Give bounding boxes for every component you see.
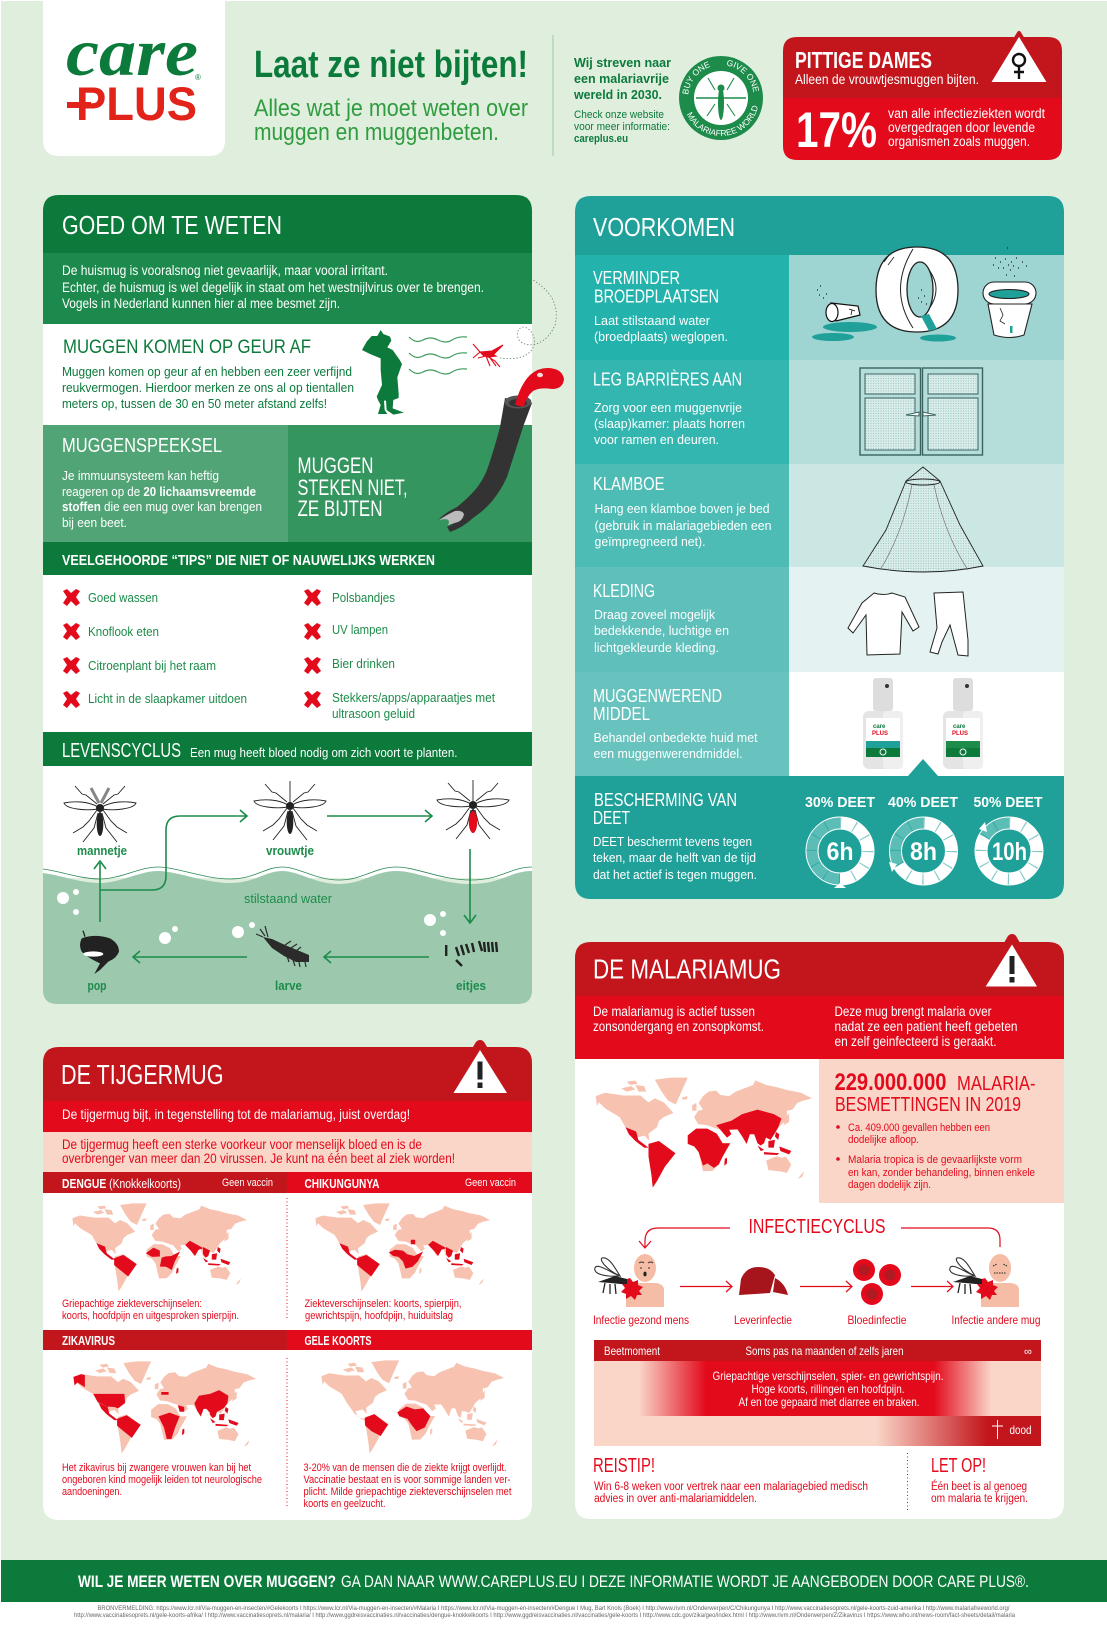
icon: flower pot — [983, 282, 1036, 338]
timeline: Griepachtige verschijnselen, spier- en gewrichtspijn. — [712, 1369, 944, 1383]
icon: pupa — [80, 931, 119, 974]
muggen steken niet: ZE BIJTEN — [298, 496, 382, 521]
panel: de tijgermug — [43, 1045, 532, 1520]
row: leg barrieres aan: (slaap)kamer: plaats horren — [594, 416, 745, 431]
tips list: UV lampen — [332, 622, 388, 637]
step labels: Infectie gezond mens — [593, 1313, 689, 1327]
logo card — [43, 0, 225, 156]
heading: DE TIJGERMUG — [61, 1059, 224, 1090]
row: klamboe: (gebruik in malariagebieden een — [594, 518, 772, 533]
panel: pittige dames: PITTIGE DAMES — [795, 47, 932, 73]
labels: eitjes — [456, 978, 486, 993]
icon: eggs — [445, 941, 497, 966]
panel: pittige dames — [783, 33, 1062, 160]
tips list: Bier drinken — [332, 656, 395, 671]
panel: voorkomen — [575, 196, 1064, 899]
labels: mannetje — [77, 843, 127, 858]
row: bescherming van deet: dat het actief is tegen muggen. — [593, 867, 757, 882]
reistip: Win 6-8 weken voor vertrek naar een malariagebied medisch — [594, 1481, 868, 1493]
card: gele koorts: Vaccinatie bestaat en is voor sommige landen ver- — [304, 1474, 511, 1486]
card: gele koorts: koorts en geelzucht. — [304, 1498, 386, 1510]
timeline: dood — [1010, 1423, 1032, 1437]
heading: VOORKOMEN — [593, 212, 735, 242]
row: klamboe: Hang een klamboe boven je bed — [594, 501, 770, 516]
icon: larva — [256, 926, 309, 967]
text: geur — [62, 364, 354, 411]
text: geur: reukvermogen. Hierdoor merken ze ons al op tientallen — [62, 380, 354, 395]
intro text — [62, 263, 484, 311]
intro text: De huismug is vooralsnog niet gevaarlijk, maar vooral irritant. — [62, 263, 388, 278]
stat: infections: en kan, zonder behandeling, binnen enkele — [848, 1167, 1035, 1179]
heading: DE MALARIAMUG — [593, 954, 781, 984]
logo card: PLUS — [76, 77, 197, 130]
clock: 6h — [806, 817, 874, 888]
logo card: care — [66, 14, 198, 90]
mosquito: female — [254, 781, 326, 840]
muggen steken niet: MUGGEN — [298, 453, 374, 478]
life cycle diagram: stilstaand water — [244, 891, 333, 906]
labels — [77, 843, 486, 993]
icon: spray bottle 1: care — [873, 724, 886, 730]
levenscyclus heading: Een mug heeft bloed nodig om zich voort te planten. — [190, 745, 458, 760]
labels: larve — [275, 978, 302, 993]
row: bescherming van deet: teken, maar de helft van de tijd — [593, 850, 756, 865]
panel: pittige dames: organismen zoals muggen. — [888, 134, 1030, 149]
row: bescherming van deet: BESCHERMING VAN — [594, 790, 737, 810]
cycle arrows — [94, 810, 476, 963]
icon: spray bottle 1: PLUS — [872, 731, 888, 737]
malaria free text: careplus.eu — [574, 133, 628, 145]
card: gele koorts: GELE KOORTS — [304, 1333, 372, 1348]
icon: tyre — [876, 247, 958, 332]
panel: de tijgermug: De tijgermug heeft een sterke voorkeur voor menselijk bloed en is de — [62, 1136, 422, 1152]
panel: goed om te weten — [43, 195, 564, 1004]
row: leg barrieres aan: LEG BARRIÈRES AAN — [593, 370, 742, 390]
levenscyclus heading: LEVENSCYCLUS — [62, 740, 181, 762]
icon: healthy person with mosquito — [595, 1254, 664, 1307]
icon: blood cells — [853, 1259, 901, 1305]
malaria free world badge: GIVE ONE — [727, 60, 760, 92]
panel: pittige dames: overgedragen door levende — [888, 120, 1035, 135]
icon: warning female — [988, 33, 1050, 84]
icon: mosquito net — [863, 467, 983, 572]
intro text: Echter, de huismug is wel degelijk in staat om het westnijlvirus over te brengen. — [62, 280, 484, 295]
icon: mosquito specks — [817, 248, 1027, 304]
row: bescherming van deet: DEET — [593, 808, 630, 828]
icon: mosquito proboscis — [438, 368, 564, 532]
panel: de tijgermug: overbrenger van meer dan 20 virussen. Je kunt na één beet al ziek worden! — [62, 1150, 455, 1166]
row: muggenwerend middel — [575, 672, 1064, 776]
smell waves — [409, 337, 467, 374]
row: klamboe: geïmpregneerd net). — [594, 534, 706, 549]
card: dengue: Griepachtige ziekteverschijnselen: — [62, 1298, 202, 1310]
stat: infections — [834, 1069, 1036, 1191]
icon: window — [860, 368, 982, 455]
row: verminder broedplaatsen: VERMINDER — [593, 268, 680, 288]
row: bescherming van deet: 50% DEET — [974, 794, 1042, 811]
icon: spray bottle 1 — [863, 678, 903, 769]
reistip: REISTIP! — [593, 1455, 655, 1477]
malaria free world badge: BUY ONE — [682, 61, 710, 94]
malaria free world badge: MALARIAFREE WORLD — [686, 106, 758, 136]
row: muggenwerend middel: MIDDEL — [593, 704, 650, 724]
reistip — [593, 1455, 868, 1505]
intro right: nadat ze een patient heeft gebeten — [834, 1019, 1018, 1034]
clock: 8h: 8h — [910, 838, 937, 866]
muggenspeeksel: bij een beet. — [62, 515, 127, 530]
infection cycle — [593, 1216, 1040, 1327]
malaria free text: wereld in 2030. — [573, 87, 662, 102]
row: kleding — [575, 567, 1064, 672]
header band — [43, 1, 1062, 160]
step labels: Infectie andere mug — [952, 1313, 1040, 1327]
row: bescherming van deet — [575, 759, 1064, 899]
text: geur: Muggen komen op geur af en hebben een zeer verfijnd — [62, 364, 352, 379]
title: Laat ze niet bijten! — [254, 44, 528, 86]
timeline: Af en toe gepaard met diarree en braken. — [738, 1395, 920, 1409]
timeline: Hoge koorts, rillingen en hoofdpijn. — [752, 1382, 904, 1396]
tips list: Knoflook eten — [88, 624, 159, 639]
row: bescherming van deet: 30% DEET — [805, 794, 875, 811]
card: chikungunya: Geen vaccin — [465, 1177, 516, 1189]
intro left: zonsondergang en zonsopkomst. — [593, 1019, 764, 1034]
tips list: Licht in de slaapkamer uitdoen — [88, 691, 247, 706]
bubbles — [57, 889, 446, 944]
icon: spray bottle 2: PLUS — [952, 731, 968, 737]
malaria free text: voor meer informatie: — [574, 121, 670, 133]
subtitle: muggen en muggenbeten. — [254, 119, 499, 146]
labels: pop — [88, 978, 107, 993]
timeline: ∞ — [1024, 1346, 1032, 1358]
icon: trousers — [930, 592, 968, 656]
stat: infections: MALARIA- — [957, 1073, 1036, 1095]
clock: 6h: 6h — [826, 838, 854, 866]
malaria free text: een malariavrije — [574, 71, 669, 86]
card: dengue — [43, 1172, 287, 1322]
source references: BRONVERMELDING: https://www.lcr.nl/Via-muggen-en-insecten/#Gelekoorts I https://www.lcr.nl/Via-muggen-en-insecten/#Malaria I https://www.lcr.nl/Via-muggen-en-insecten/#Dengue I Mug, Bart Knols (Boek) I http://www.rivm.nl/Onderwerpen/C/Chikungunya I http://www.vaccinatiesoprets.nl/gele-koorts-zuid-amerika I http://www.malariafreeworld.org/ — [98, 1606, 1010, 1612]
tips list: Stekkers/apps/apparaatjes met — [332, 690, 495, 705]
row: kleding: bedekkende, luchtige en — [594, 623, 729, 638]
life cycle diagram — [43, 766, 532, 1004]
source references — [74, 1606, 1016, 1619]
card: dengue: koorts, hoofdpijn en uitgesproken spierpijn. — [62, 1310, 239, 1322]
card: gele koorts: 3-20% van de mensen die de ziekte krijgt overlijdt. — [304, 1462, 506, 1474]
icon: infected person with mosquito — [950, 1254, 1019, 1307]
card: gele koorts — [287, 1330, 532, 1510]
let op — [931, 1455, 1028, 1505]
stat: infections: BESMETTINGEN IN 2019 — [835, 1094, 1021, 1116]
timeline — [594, 1340, 1041, 1446]
muggen steken niet — [288, 425, 532, 542]
panel: pittige dames: van alle infectieziekten wordt — [888, 106, 1045, 121]
let op: LET OP! — [931, 1455, 986, 1477]
card: zikavirus: ongeboren kind mogelijk leiden tot neurologische — [62, 1474, 262, 1486]
intro right: Deze mug brengt malaria over — [834, 1004, 992, 1019]
tips heading: VEELGEHOORDE “TIPS” DIE NIET OF NAUWELIJKS WERKEN — [62, 552, 435, 569]
tips list — [43, 575, 532, 732]
muggenspeeksel: Je immuunsysteem kan heftig — [62, 468, 219, 483]
icon: spray bottle 2 — [943, 678, 983, 769]
malaria free text — [573, 55, 671, 145]
intro left: De malariamug is actief tussen — [593, 1004, 755, 1019]
row: leg barrieres aan — [575, 360, 1064, 464]
icon: liver — [739, 1267, 788, 1295]
stat: infections: dagen dodelijk zijn. — [848, 1179, 931, 1191]
malaria free text: Check onze website — [574, 109, 664, 121]
flight path — [500, 280, 556, 359]
footer bar — [1, 1560, 1107, 1602]
row: verminder broedplaatsen — [575, 247, 1064, 360]
malaria free text: Wij streven naar — [574, 55, 671, 70]
row: verminder broedplaatsen: Laat stilstaand water — [594, 313, 711, 328]
card: zikavirus: Het zikavirus bij zwangere vrouwen kan bij het — [62, 1462, 251, 1474]
icon: red mosquito — [473, 344, 503, 367]
row: verminder broedplaatsen: (broedplaats) weglopen. — [594, 329, 728, 344]
mosquito: fed female — [437, 780, 509, 839]
intro left — [593, 1004, 764, 1034]
row: muggenwerend middel: een muggenwerendmiddel. — [594, 746, 742, 761]
icon: shirt — [848, 593, 919, 655]
icon: man smelling — [362, 330, 404, 415]
stat: infections: Malaria tropica is de gevaarlijkste vorm — [848, 1154, 1022, 1166]
timeline: Beetmoment — [604, 1344, 661, 1358]
malaria free world badge — [679, 56, 763, 140]
row: muggenwerend middel: MUGGENWEREND — [593, 686, 722, 706]
clock: 10h: 10h — [992, 838, 1027, 866]
subheading: geur: MUGGEN KOMEN OP GEUR AF — [63, 336, 311, 358]
panel: de malariamug — [575, 939, 1064, 1519]
clock: 10h — [975, 817, 1043, 885]
card: dengue: Geen vaccin — [222, 1177, 273, 1189]
muggenspeeksel: stoffen die een mug over kan brengen — [62, 499, 262, 514]
labels: vrouwtje — [266, 843, 314, 858]
card: chikungunya: Ziekteverschijnselen: koorts, spierpijn, — [304, 1298, 462, 1310]
card: zikavirus — [43, 1330, 287, 1498]
row: muggenwerend middel: Behandel onbedekte huid met — [594, 730, 758, 745]
card: chikungunya: gewrichtspijn, hoofdpijn, huiduitslag — [305, 1310, 453, 1322]
card: chikungunya — [287, 1172, 532, 1322]
stat: infections: dodelijke afloop. — [848, 1134, 919, 1146]
step labels: Leverinfectie — [734, 1313, 792, 1327]
row: klamboe — [575, 464, 1064, 572]
row: bescherming van deet: 40% DEET — [888, 794, 958, 811]
intro right — [834, 1004, 1018, 1049]
stat: infections: Ca. 409.000 gevallen hebben een — [848, 1122, 990, 1134]
muggenspeeksel — [43, 425, 288, 542]
row: verminder broedplaatsen: BROEDPLAATSEN — [594, 286, 719, 306]
step labels — [593, 1313, 1040, 1327]
infection cycle: INFECTIECYCLUS — [748, 1216, 886, 1238]
icon: spray bottle 2: care — [953, 724, 966, 730]
card: dengue: DENGUE (Knokkelkoorts) — [62, 1176, 181, 1191]
timeline: Soms pas na maanden of zelfs jaren — [746, 1344, 904, 1358]
card: zikavirus: aandoeningen. — [62, 1486, 122, 1498]
reistip: advies in over anti-malariamiddelen. — [594, 1493, 757, 1505]
tips list: Citroenplant bij het raam — [88, 658, 216, 673]
muggenspeeksel: reageren op de 20 lichaamsvreemde — [62, 484, 256, 499]
stat: infections: 229.000.000 — [834, 1069, 946, 1096]
panel: pittige dames: Alleen de vrouwtjesmuggen bijten. — [795, 72, 979, 87]
tips heading — [43, 542, 532, 575]
icon: tin can — [826, 303, 860, 322]
row: kleding: Draag zoveel mogelijk — [594, 607, 715, 622]
tips list: Goed wassen — [88, 590, 158, 605]
row: klamboe: KLAMBOE — [593, 474, 664, 494]
intro text: Vogels in Nederland kunnen hier al mee besmet zijn. — [62, 296, 340, 311]
row: kleding: KLEDING — [593, 581, 655, 601]
row: bescherming van deet: DEET beschermt tevens tegen — [593, 834, 752, 849]
subtitle: Alles wat je moet weten over — [254, 95, 528, 122]
map: malaria — [596, 1078, 812, 1188]
intro lines: De tijgermug bijt, in tegenstelling tot de malariamug, juist overdag! — [62, 1106, 410, 1122]
subtitle — [254, 95, 528, 146]
card: chikungunya: CHIKUNGUNYA — [304, 1176, 380, 1191]
levenscyclus heading — [43, 732, 532, 766]
icon: warning — [450, 1045, 510, 1095]
text: geur: meters op, tussen de 30 en 50 meter afstand zelfs! — [62, 396, 327, 411]
card: gele koorts: plicht. Milde griepachtige ziekteverschijnselen met — [304, 1486, 512, 1498]
step labels: Bloedinfectie — [848, 1313, 907, 1327]
mosquito: male — [64, 786, 136, 842]
muggen steken niet: STEKEN NIET, — [298, 475, 408, 500]
icon: warning — [984, 939, 1040, 988]
tips list: Polsbandjes — [332, 590, 395, 605]
row: leg barrieres aan: voor ramen en deuren. — [594, 432, 719, 447]
let op: om malaria te krijgen. — [931, 1493, 1028, 1505]
clock: 8h — [889, 817, 958, 885]
footer bar: WIL JE MEER WETEN OVER MUGGEN? — [78, 1573, 336, 1591]
let op: Één beet is al genoeg — [931, 1480, 1027, 1493]
row: kleding: lichtgekleurde kleding. — [594, 640, 719, 655]
source references: http://www.vaccinatiesoprets.nl/gele-koorts-afrika/ I http://www.vaccinatiesoprets.nl/malaria/ I http://www.ggdreisvaccinaties.nl/vaccinaties/dengue-knokkelkoorts I http://www.ggdreisvaccinaties.nl/vaccinaties/gele-koorts I http://www.cdc.gov/zika/geo/index.html I http://www.rivm.nl/Onderwerpen/Z/Zikavirus I https://www.who.int/news-room/fact-sheets/detail/malaria — [74, 1613, 1016, 1619]
heading: GOED OM TE WETEN — [62, 210, 282, 240]
tips list: ultrasoon geluid — [332, 706, 415, 721]
icon: puddles — [812, 322, 956, 342]
cycle arrows — [639, 1228, 1000, 1292]
muggenspeeksel: MUGGENSPEEKSEL — [62, 435, 222, 457]
card: zikavirus: ZIKAVIRUS — [62, 1333, 115, 1348]
row: leg barrieres aan: Zorg voor een muggenvrije — [594, 400, 742, 415]
panel: pittige dames: 17% — [796, 102, 877, 158]
intro right: en zelf geinfecteerd is geraakt. — [834, 1034, 996, 1049]
logo card: ® — [195, 73, 201, 82]
